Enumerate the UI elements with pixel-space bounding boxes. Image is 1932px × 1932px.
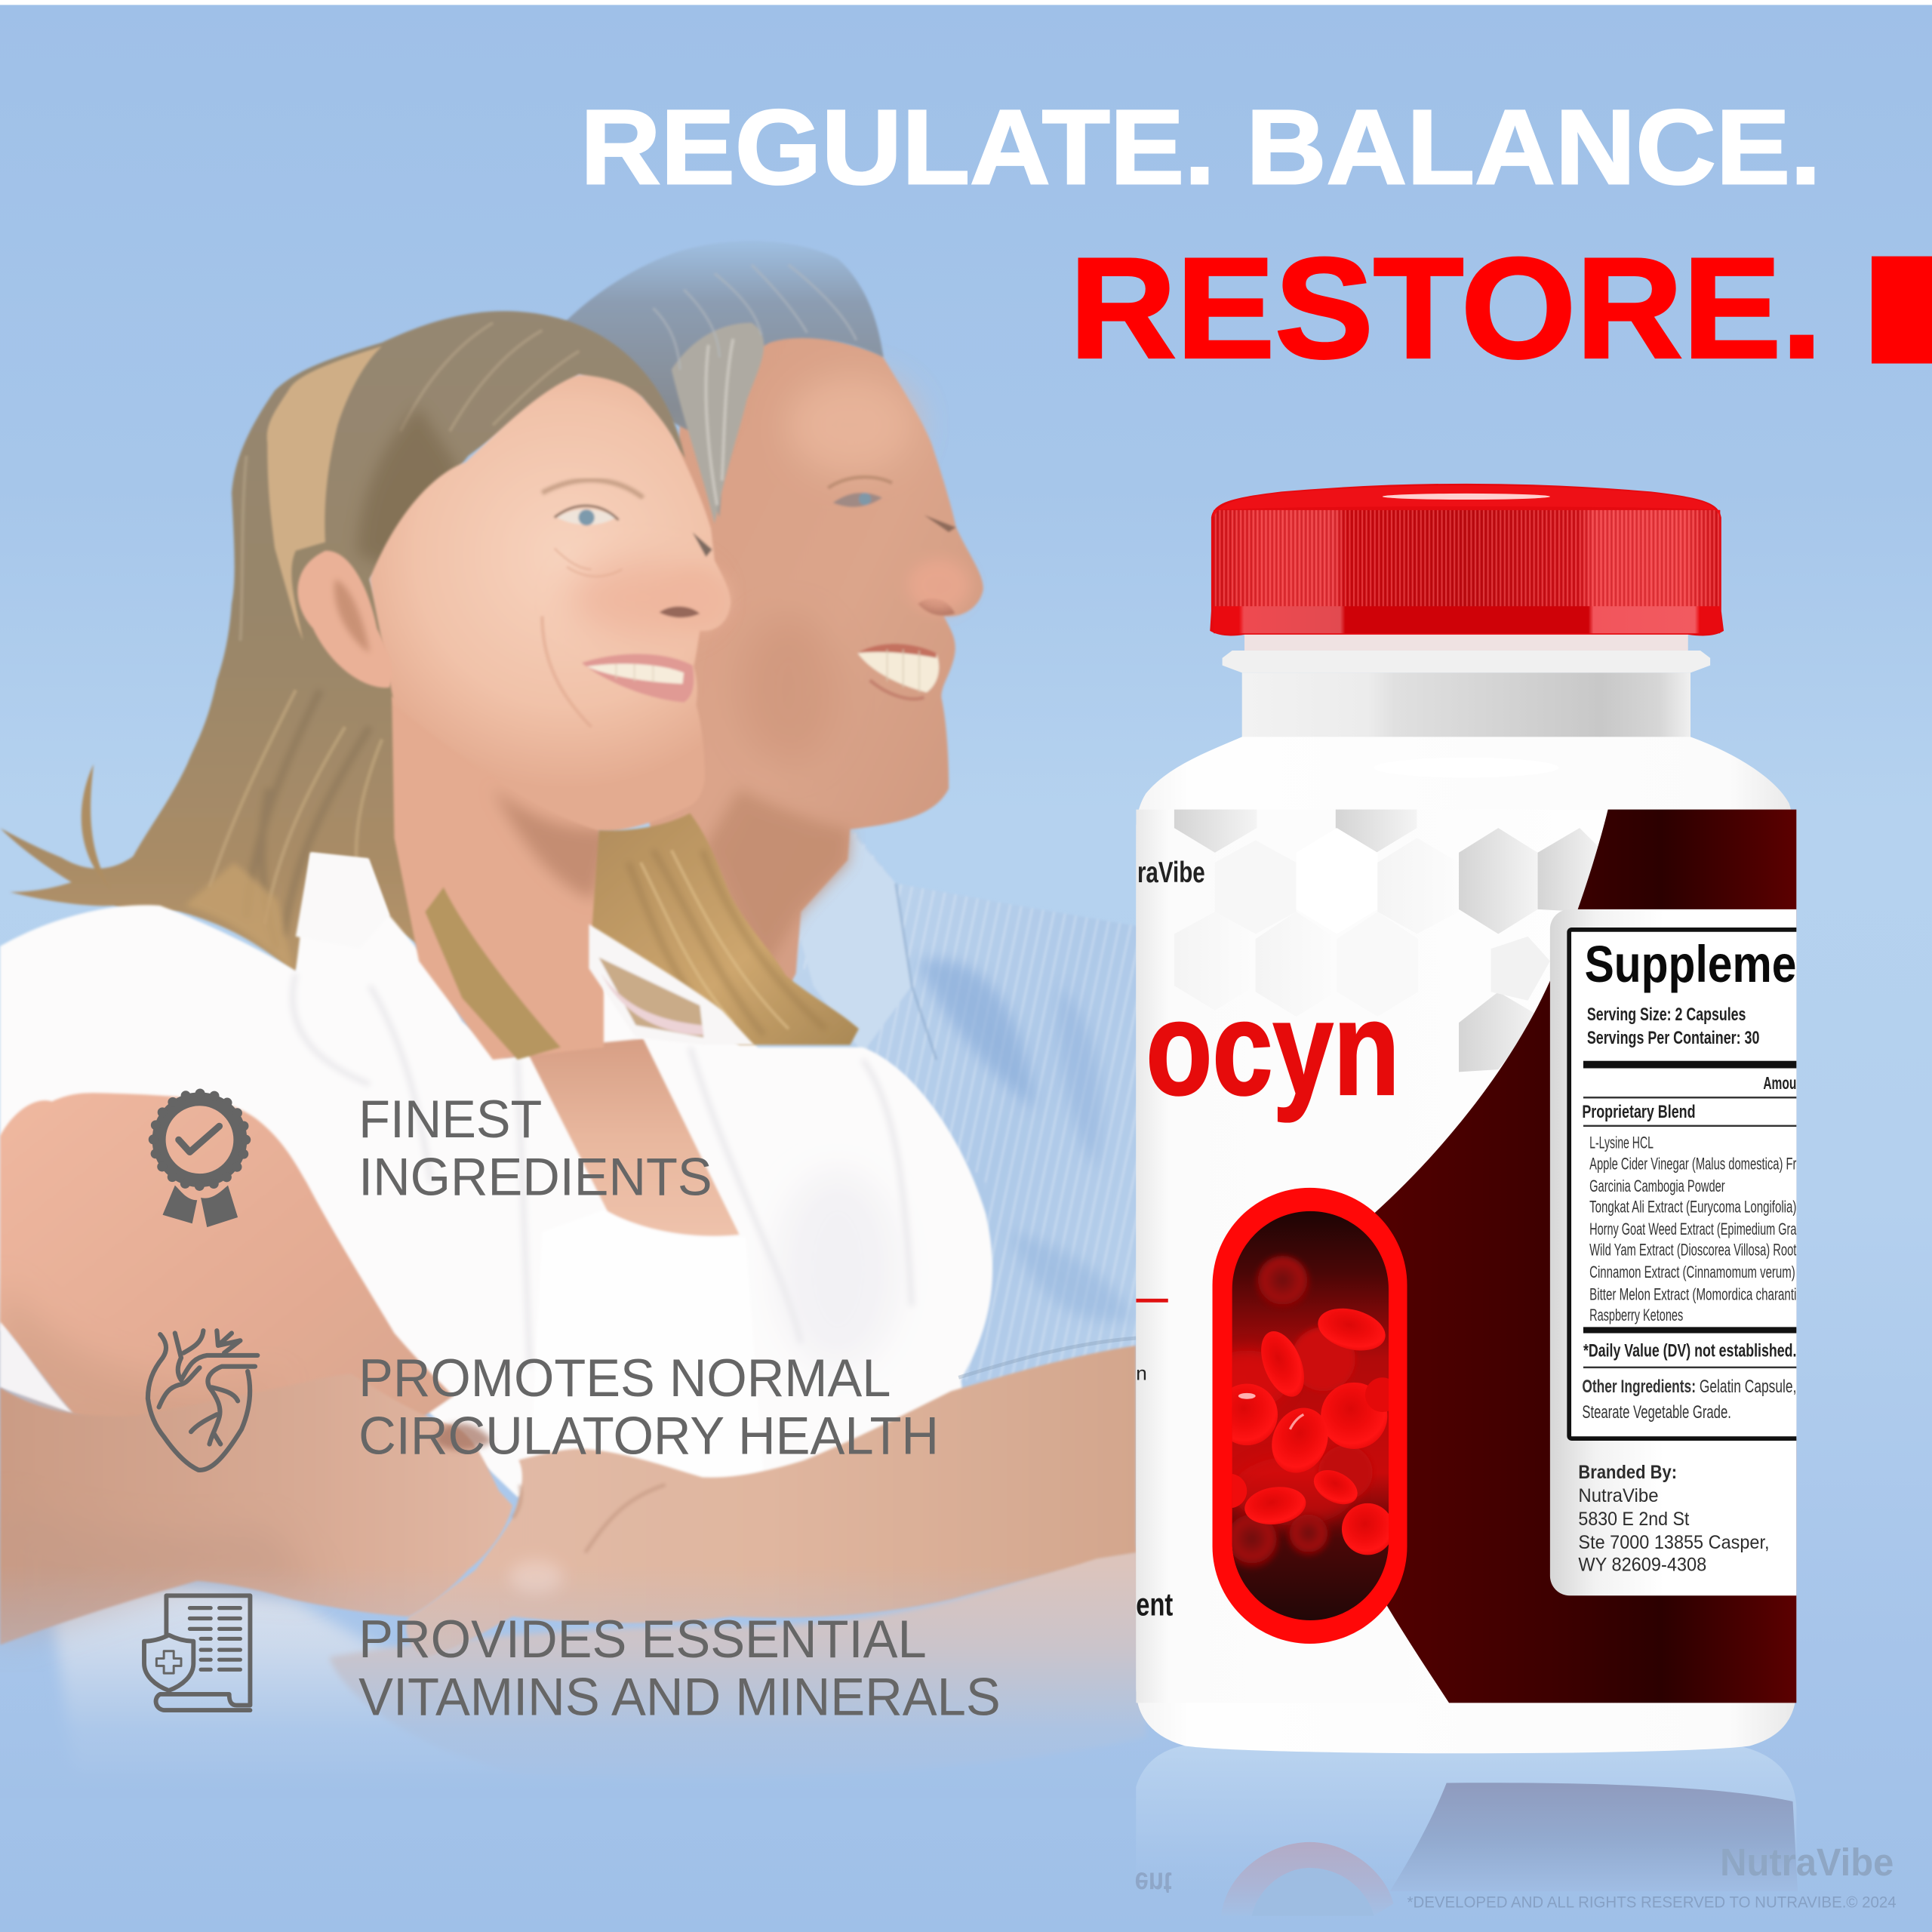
supplement facts panel: *Daily Value (DV) not established. (1583, 1342, 1796, 1361)
woman's ear (297, 551, 392, 688)
photo: smiling couple (0, 241, 1183, 1799)
man's grey hair (565, 241, 884, 524)
text: vitamins and minerals: VITAMINS AND MINERALS (358, 1667, 1001, 1727)
label background (1136, 810, 1796, 1703)
man's sleeve cuff edge (958, 1338, 1136, 1377)
woman's upper arm (0, 1093, 454, 1466)
brand name fragment: raVibe (1137, 857, 1205, 889)
supplement facts panel: Amou (1763, 1073, 1796, 1093)
bottle cap (1210, 484, 1724, 635)
woman's neck (392, 696, 616, 1060)
ingredient list: Horny Goat Weed Extract (Epimedium Gra (1589, 1220, 1797, 1238)
icon: document with shield (144, 1595, 250, 1710)
other ingredients: Other Ingredients: Gelatin Capsule, (1582, 1377, 1796, 1397)
product bottle (1136, 484, 1840, 1753)
facts box (1567, 928, 1796, 1441)
text: finest ingredients: FINEST (358, 1089, 542, 1149)
bottle reflection (1135, 1743, 1798, 1916)
benefit: vitamins and minerals (144, 1595, 1001, 1727)
supplement facts panel: Stearate Vegetable Grade. (1582, 1403, 1731, 1423)
ingredient list: Apple Cider Vinegar (Malus domestica) Fr (1589, 1154, 1796, 1173)
capsule with blood cells (1205, 1188, 1407, 1644)
branded by: Branded By: (1578, 1462, 1677, 1483)
product name fragment: ocyn (1146, 974, 1400, 1123)
shirt collar with lace (296, 853, 754, 1044)
icon: award badge (153, 1094, 246, 1227)
woman's lower white sleeve (0, 1322, 72, 1414)
supplement facts panel (1550, 909, 1796, 1595)
branded by (1578, 1462, 1769, 1576)
woman's face (370, 374, 731, 831)
ingredient list: L-Lysine HCL (1589, 1134, 1654, 1152)
copyright footer: *DEVELOPED AND ALL RIGHTS RESERVED TO NUTRAVIBE.© 2024 (1407, 1894, 1897, 1911)
ingredient list: Garcinia Cambogia Powder (1589, 1177, 1725, 1195)
woman's right hair (592, 814, 859, 1044)
serving info: Servings Per Container: 30 (1587, 1028, 1759, 1048)
ingredient list: Bitter Melon Extract (Momordica charanti (1589, 1284, 1796, 1303)
lower white sleeve fading (49, 1584, 592, 1774)
benefit: circulatory health (148, 1331, 939, 1470)
man's right forearm and hand (406, 1346, 1136, 1657)
man's eye and nose (833, 493, 882, 507)
red rule (1136, 1299, 1168, 1303)
serving info (1587, 1004, 1759, 1048)
text: vitamins and minerals (358, 1609, 1001, 1727)
watermark logo: NutraVibe (1720, 1841, 1894, 1884)
text: circulatory health: PROMOTES NORMAL (358, 1348, 891, 1407)
text: circulatory health (358, 1348, 939, 1466)
facts heading: Suppleme (1585, 935, 1796, 993)
top white strip (0, 0, 1932, 5)
man's neck and face (641, 327, 983, 1035)
woman's lower arm (329, 1546, 1146, 1779)
woman's eye, brow and nose (557, 509, 616, 525)
woman's smile (582, 654, 694, 703)
shoulder highlight (1374, 758, 1558, 777)
text fragment: n: n (1136, 1362, 1147, 1385)
headline: restore: RESTORE. (1069, 229, 1823, 388)
text: finest ingredients: INGREDIENTS (358, 1147, 712, 1207)
icon: anatomical heart (148, 1331, 257, 1470)
branded by: 5830 E 2nd St (1578, 1509, 1689, 1530)
woman's white shirt (0, 853, 992, 1497)
maroon swoosh (1374, 810, 1796, 1703)
text: vitamins and minerals: PROVIDES ESSENTIAL (358, 1609, 927, 1669)
headline: regulate balance: REGULATE. BALANCE. (580, 88, 1821, 206)
bottle neck and ring (1223, 631, 1710, 742)
bottom photo fade (0, 1564, 1183, 1799)
red accent block (1872, 257, 1932, 364)
man's shirt (740, 828, 1146, 1725)
woman's chest and undershirt (526, 1038, 764, 1478)
ingredient list: Wild Yam Extract (Dioscorea Villosa) Root (1589, 1241, 1796, 1260)
blood cells (1232, 1253, 1389, 1571)
hexagon pattern (1174, 810, 1601, 1072)
man's smile (857, 644, 939, 693)
ingredient list: Tongkat Ali Extract (Eurycoma Longifolia) (1589, 1198, 1796, 1217)
woman's back hair (0, 311, 685, 1048)
benefit: finest ingredients (153, 1089, 712, 1227)
text fragment: ent: ent (1136, 1586, 1173, 1622)
ingredient list: Cinnamon Extract (Cinnamomum verum) (1589, 1263, 1795, 1281)
supplement facts panel: Proprietary Blend (1582, 1102, 1696, 1122)
mirrored label text: ent (1135, 1866, 1172, 1901)
label artwork (1136, 810, 1840, 1703)
branded by: WY 82609-4308 (1578, 1555, 1706, 1576)
man's arm from the left (0, 1374, 512, 1645)
ingredient list: Raspberry Ketones (1589, 1306, 1683, 1324)
ingredient list (1589, 1134, 1797, 1324)
serving info: Serving Size: 2 Capsules (1587, 1004, 1746, 1025)
branded by: Ste 7000 13855 Casper, (1578, 1532, 1769, 1553)
woman's tan headband (267, 346, 382, 641)
cap highlight (1383, 494, 1550, 500)
bottle body (1136, 737, 1796, 1753)
branded by: NutraVibe (1578, 1485, 1659, 1506)
text: circulatory health: CIRCULATORY HEALTH (358, 1406, 939, 1466)
text: finest ingredients (358, 1089, 712, 1207)
